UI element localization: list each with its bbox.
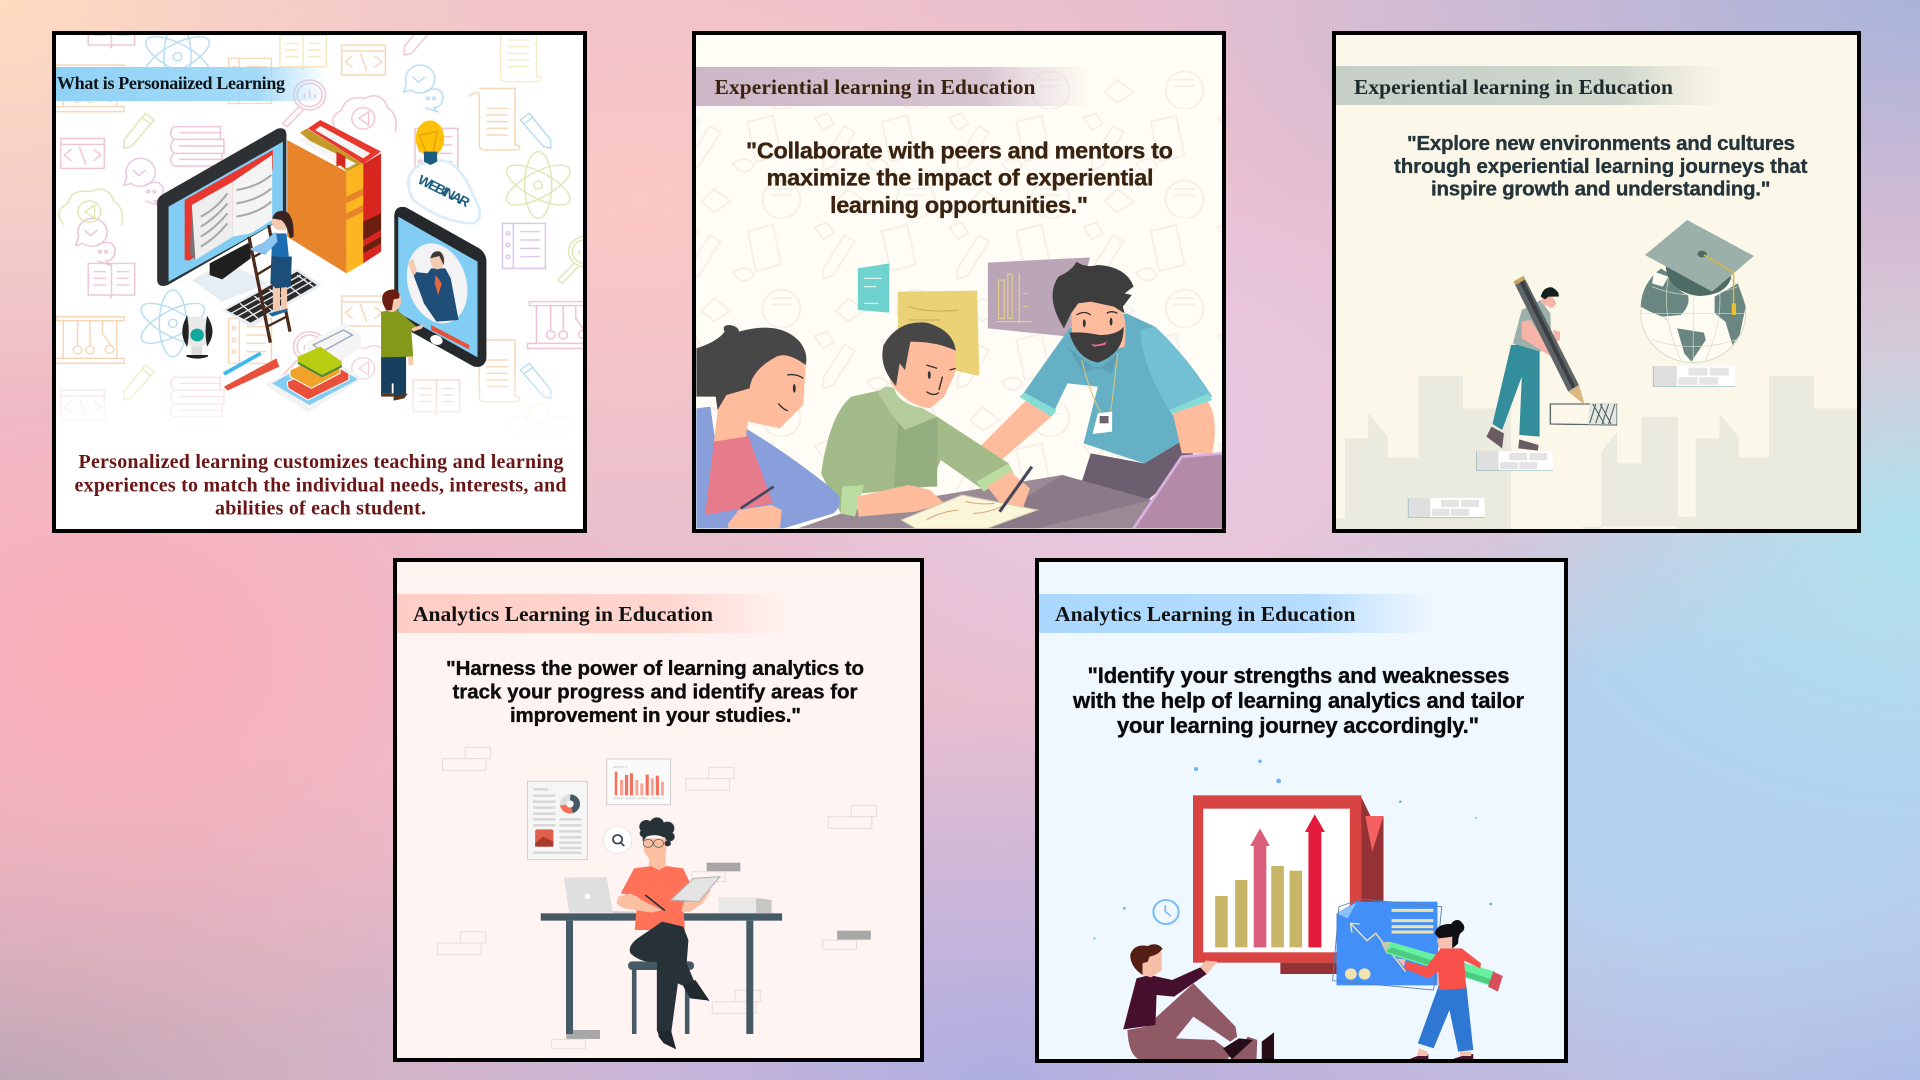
floating bricks <box>1408 366 1735 517</box>
header band: what is personalized learning: What is Personaiized Learning <box>57 73 285 93</box>
desk <box>541 913 782 1034</box>
icon: search bubble <box>603 826 632 854</box>
quote: harness the power: track your progress and identify areas for <box>452 680 858 704</box>
text block: personalized learning description <box>74 451 566 520</box>
quote: identify your strengths <box>1072 663 1524 738</box>
text block: personalized learning description: abilities of each student. <box>215 498 426 520</box>
text block: personalized learning description: experiences to match the individual needs, interests, and <box>74 474 566 496</box>
person: man with beard <box>980 262 1215 500</box>
quote: collaborate with peers: learning opportunities." <box>830 192 1088 218</box>
decorative icon pattern <box>56 35 583 426</box>
header band: experiential learning <box>1336 66 1732 105</box>
panel: analytics learning identify <box>1037 560 1566 1061</box>
panel: analytics learning harness <box>395 560 922 1060</box>
quote: identify your strengths: "Identify your strengths and weaknesses <box>1088 663 1510 688</box>
chart board with growth bars <box>1193 795 1383 974</box>
quote: harness the power: improvement in your studies." <box>510 704 801 727</box>
icon: man touching tablet <box>381 289 424 401</box>
icon: pencil and ruler <box>224 353 279 391</box>
header band: experiential learning: Experiential learning in Education <box>1354 75 1673 99</box>
illustration: chart board with two people <box>1093 760 1503 1060</box>
illustration: three people collaborating <box>696 257 1223 528</box>
icon: laptop and paper stack <box>564 877 772 913</box>
quote: collaborate with peers <box>746 138 1173 218</box>
decorative dots <box>1093 760 1492 939</box>
quote: identify your strengths: your learning journey accordingly." <box>1117 713 1479 738</box>
icon: stacked textbooks <box>287 120 381 273</box>
person: student <box>617 817 720 1049</box>
quote: collaborate with peers: "Collaborate with peers and mentors to <box>746 138 1173 164</box>
quote: explore new environments: inspire growth and understanding." <box>1431 178 1770 200</box>
icon: desktop monitor with open book <box>157 128 286 302</box>
quote: harness the power: "Harness the power of learning analytics to <box>446 657 864 680</box>
icon: clock <box>1153 900 1179 924</box>
icon: webinar lightbulb cloud: WEBINAR <box>415 172 473 210</box>
icon: report document with donut <box>527 781 587 860</box>
person: girl with hoodie <box>696 325 840 528</box>
table and laptop <box>798 453 1223 528</box>
quote: explore new environments: through experiential learning journeys that <box>1394 155 1808 178</box>
icon: blue note with trend line <box>1333 899 1442 990</box>
icon: webcam <box>182 316 212 359</box>
icon: globe with graduation cap <box>1641 220 1754 363</box>
icon: man with giant pencil <box>1486 276 1616 451</box>
quote: collaborate with peers: maximize the impact of experiential <box>766 164 1154 190</box>
person: boy writing <box>821 322 1037 528</box>
header band: analytics learning <box>1039 594 1435 633</box>
panel: what is personalized learning <box>54 13 601 533</box>
text block: personalized learning description: Personalized learning customizes teaching and learning <box>78 451 564 473</box>
icon: keyboard <box>222 268 322 327</box>
wall notes <box>858 257 1090 376</box>
panel: experiential learning explore <box>1334 33 1859 531</box>
icon: ladder and student <box>249 211 294 343</box>
quote: identify your strengths: with the help of learning analytics and tailor <box>1072 688 1524 713</box>
bar chart card <box>607 759 671 805</box>
quote: explore new environments <box>1394 132 1808 200</box>
icon: books on tablet <box>265 323 363 413</box>
icon: tablet with presenter <box>394 207 486 367</box>
person: man sitting <box>1123 944 1274 1060</box>
illustration: student at desk <box>438 747 876 1049</box>
illustration: personalized learning scene <box>56 35 583 426</box>
header band: analytics learning <box>397 594 794 633</box>
panel: experiential learning collaborate <box>694 33 1224 531</box>
quote: explore new environments: "Explore new environments and cultures <box>1407 132 1795 155</box>
header band: experiential learning <box>696 67 1092 106</box>
quote: harness the power <box>446 657 864 727</box>
header band: analytics learning: Analytics Learning in Education <box>1055 602 1356 626</box>
icon: webinar lightbulb cloud <box>408 120 480 223</box>
header band: experiential learning: Experiential learning in Education <box>714 75 1036 99</box>
person: woman holding pencil <box>1381 920 1503 1060</box>
illustration: pencil man and globe <box>1336 220 1857 530</box>
header band: analytics learning: Analytics Learning in Education <box>413 602 713 626</box>
decorative bricks <box>438 747 876 1049</box>
city skyline <box>1336 376 1857 530</box>
header band: what is personalized learning <box>56 67 326 101</box>
